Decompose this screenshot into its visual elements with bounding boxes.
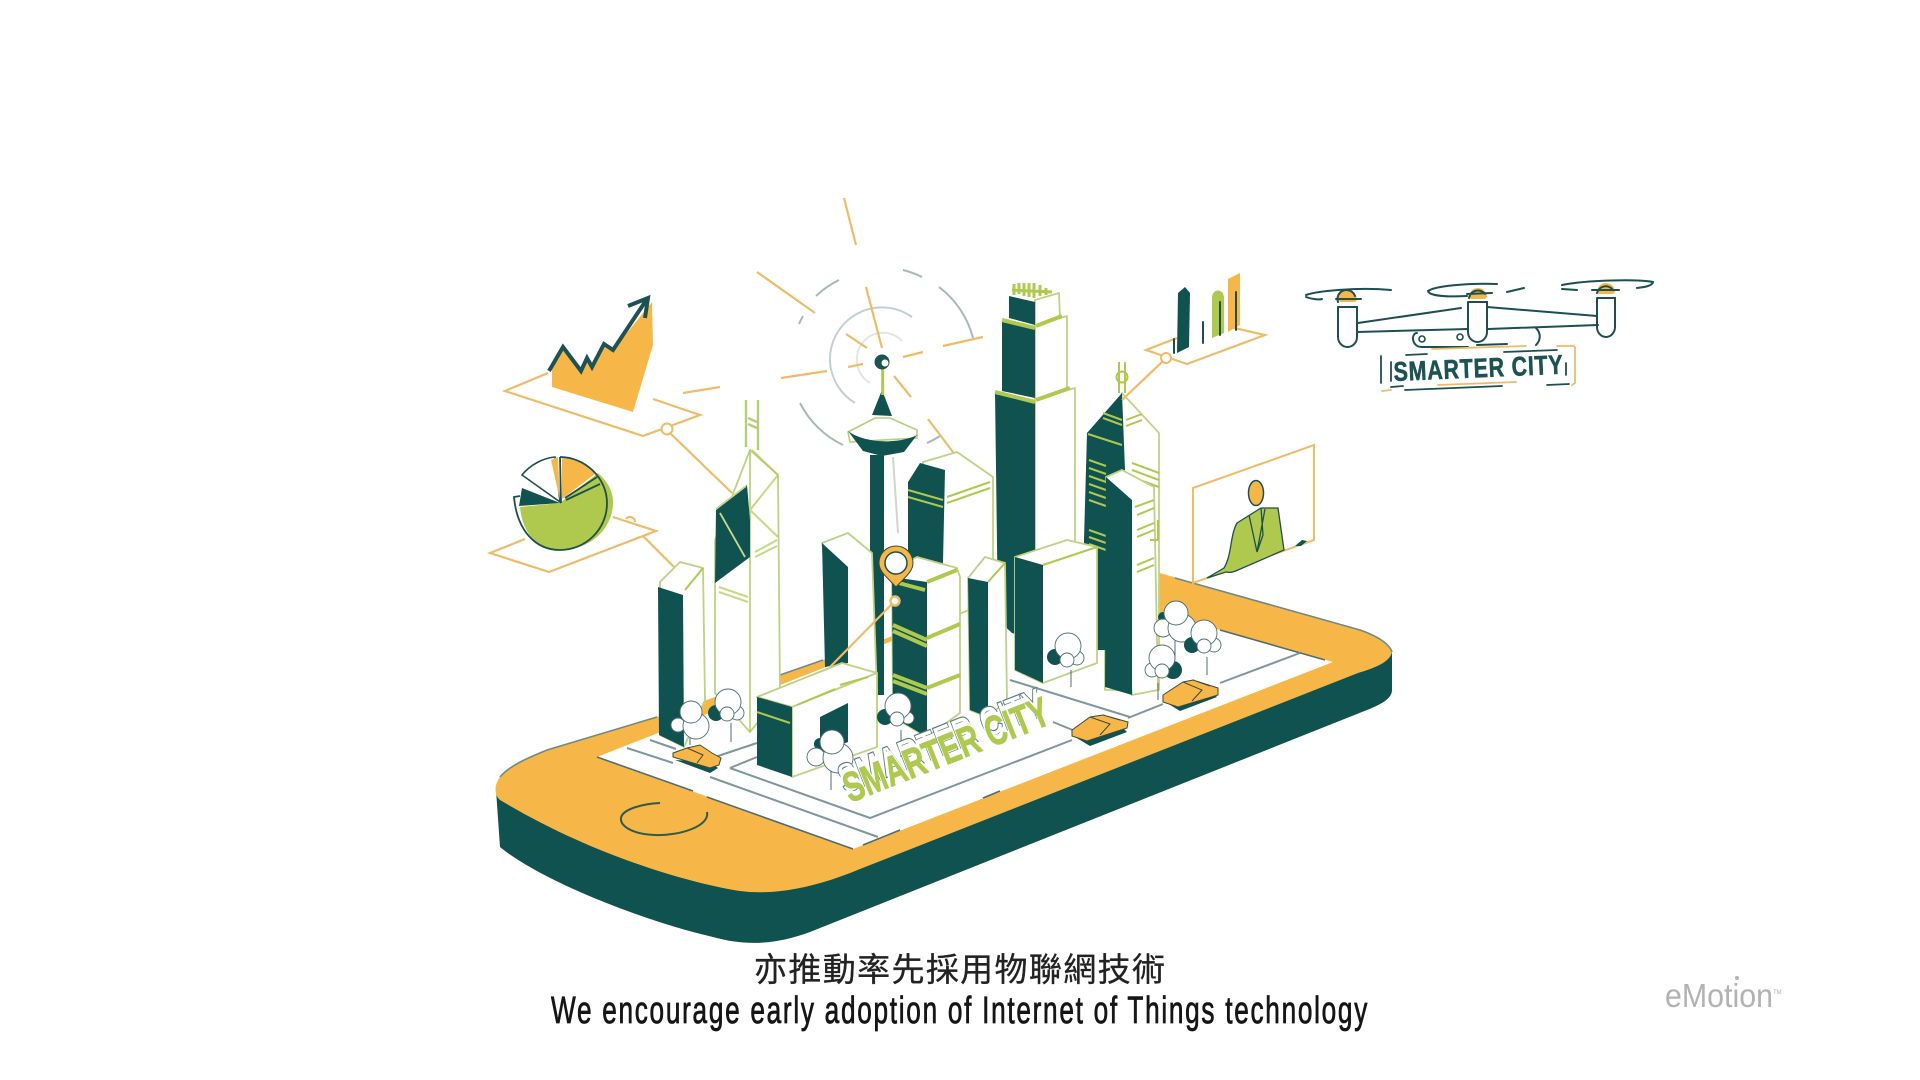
front [792, 673, 877, 777]
plane [490, 517, 656, 572]
chart plane [505, 373, 700, 436]
desk object [1295, 540, 1307, 546]
cone [872, 390, 892, 416]
dark face [892, 577, 927, 737]
plane [1146, 327, 1265, 364]
rotor caps [1336, 286, 1619, 302]
bar lines [1174, 292, 1236, 353]
dark face [908, 463, 945, 600]
drone [1306, 280, 1653, 391]
car 2 [1072, 715, 1128, 746]
facet lines [716, 486, 746, 557]
shaft [870, 455, 884, 695]
logo word: eMotion [1665, 977, 1773, 1014]
panel: pie chart [490, 457, 680, 573]
top edge [1043, 547, 1097, 565]
building: spired tower [1084, 362, 1159, 690]
tree 5 [1047, 633, 1084, 687]
phone [496, 560, 1392, 943]
arms [1358, 307, 1598, 332]
dark facet [715, 485, 750, 583]
caption: Chinese: 亦推動率先採用物聯網技術 [754, 951, 1165, 988]
twin spires [746, 400, 758, 450]
drone bodies [1338, 298, 1615, 347]
sign frame [1381, 346, 1575, 391]
connector [643, 536, 680, 573]
radar signal arcs [799, 270, 973, 445]
pin hole [885, 552, 907, 574]
TV tower [848, 354, 917, 695]
node [1161, 353, 1171, 363]
sign face: SMARTER CITY [836, 688, 1056, 811]
dark face [658, 587, 684, 747]
dash [683, 387, 720, 393]
ball highlight [882, 360, 888, 366]
logo: eMotion [1665, 976, 1782, 1014]
tree 1 [671, 701, 709, 745]
building: stacked block [892, 557, 960, 737]
phone screen [597, 581, 1333, 849]
car 1 [673, 745, 721, 773]
orange area [552, 302, 653, 412]
suit [1207, 508, 1284, 578]
tower dark tiers [995, 296, 1035, 640]
sign text: SMARTER CITY [1393, 350, 1564, 387]
road lines [627, 653, 1300, 837]
dish top [848, 418, 917, 442]
antenna [881, 368, 884, 395]
pie outline [514, 457, 607, 550]
pin line [830, 601, 895, 667]
camera lenses [1419, 334, 1463, 342]
tree 6 [1145, 645, 1182, 700]
radar rays [757, 198, 983, 472]
panel: growth chart [505, 298, 732, 493]
tower light face [1035, 293, 1075, 640]
connector [670, 433, 732, 493]
building: front tall tower [1105, 470, 1158, 695]
green lines [757, 677, 868, 723]
building: back tower behind stacked block [1015, 540, 1097, 683]
dark face [968, 578, 988, 717]
dish bottom [848, 431, 917, 456]
dark side [1084, 393, 1125, 650]
propellers [1306, 280, 1653, 299]
building: slim tower [968, 557, 1007, 717]
node [626, 517, 635, 522]
side windows [1135, 500, 1158, 572]
3D street sign [831, 679, 1056, 811]
tower light mast [893, 457, 898, 533]
sign extrusion fill: SMARTER CITY [834, 684, 1054, 807]
tower body [715, 450, 780, 732]
building: band-topped block [908, 452, 993, 620]
panel: bar chart [1122, 273, 1265, 400]
phone top face [496, 560, 1392, 892]
top edges [685, 568, 703, 590]
lapel [1249, 508, 1265, 552]
caption: English: We encourage early adoption of Internet of Things technology [551, 990, 1369, 1032]
logo mark: TM [1773, 990, 1782, 996]
tree 8 [1184, 620, 1221, 675]
bands [908, 482, 990, 507]
spire ring [1116, 372, 1128, 382]
building: centre tower [822, 533, 877, 700]
skyscraper: tall tower [995, 283, 1075, 640]
location pin [830, 546, 913, 667]
tree 2 [708, 689, 744, 742]
frame [1193, 445, 1314, 583]
pin node [890, 596, 900, 606]
pin body [879, 546, 913, 587]
sign extrusion outline: SMARTER CITY [831, 679, 1051, 802]
window ladders [1088, 413, 1159, 550]
orange sliver [551, 457, 560, 500]
dark bar [1177, 287, 1190, 353]
light side [1105, 393, 1159, 690]
phone outline strokes [500, 578, 1392, 777]
tree 3 [877, 693, 914, 757]
trees [671, 601, 1221, 790]
top [757, 663, 877, 707]
building: gate block [757, 663, 877, 777]
dark face [822, 543, 848, 667]
white wedge [522, 457, 560, 502]
edge [988, 563, 1005, 582]
bands [893, 570, 960, 694]
panel: person [1193, 445, 1314, 583]
dark side [757, 697, 792, 777]
spire [1119, 362, 1125, 393]
home button [621, 803, 707, 835]
tree 7 [1154, 601, 1196, 660]
trend arrow [549, 298, 648, 371]
teal wedge [519, 488, 560, 506]
orange wedge [562, 457, 595, 499]
dark face [1015, 557, 1043, 683]
connector [1122, 362, 1162, 400]
orange bar [1228, 273, 1240, 332]
cars [673, 680, 1218, 773]
head [1248, 480, 1264, 506]
opening [820, 703, 848, 753]
dark face [1105, 477, 1132, 695]
building: diagonal-braced tower [715, 400, 780, 732]
logo dot [1735, 976, 1739, 980]
phone side [496, 652, 1392, 943]
crown [1012, 283, 1052, 298]
rotor domes [1338, 283, 1615, 302]
camera [1413, 328, 1540, 347]
car 3 [1163, 680, 1218, 711]
tier bands [995, 316, 1070, 402]
braces [719, 450, 778, 732]
connector node [662, 424, 672, 434]
ball [874, 354, 890, 370]
tree 4 [807, 730, 853, 790]
screen edges [597, 630, 1325, 849]
green pie [520, 473, 613, 550]
green bar [1212, 290, 1224, 338]
building: left front tower [658, 562, 705, 747]
